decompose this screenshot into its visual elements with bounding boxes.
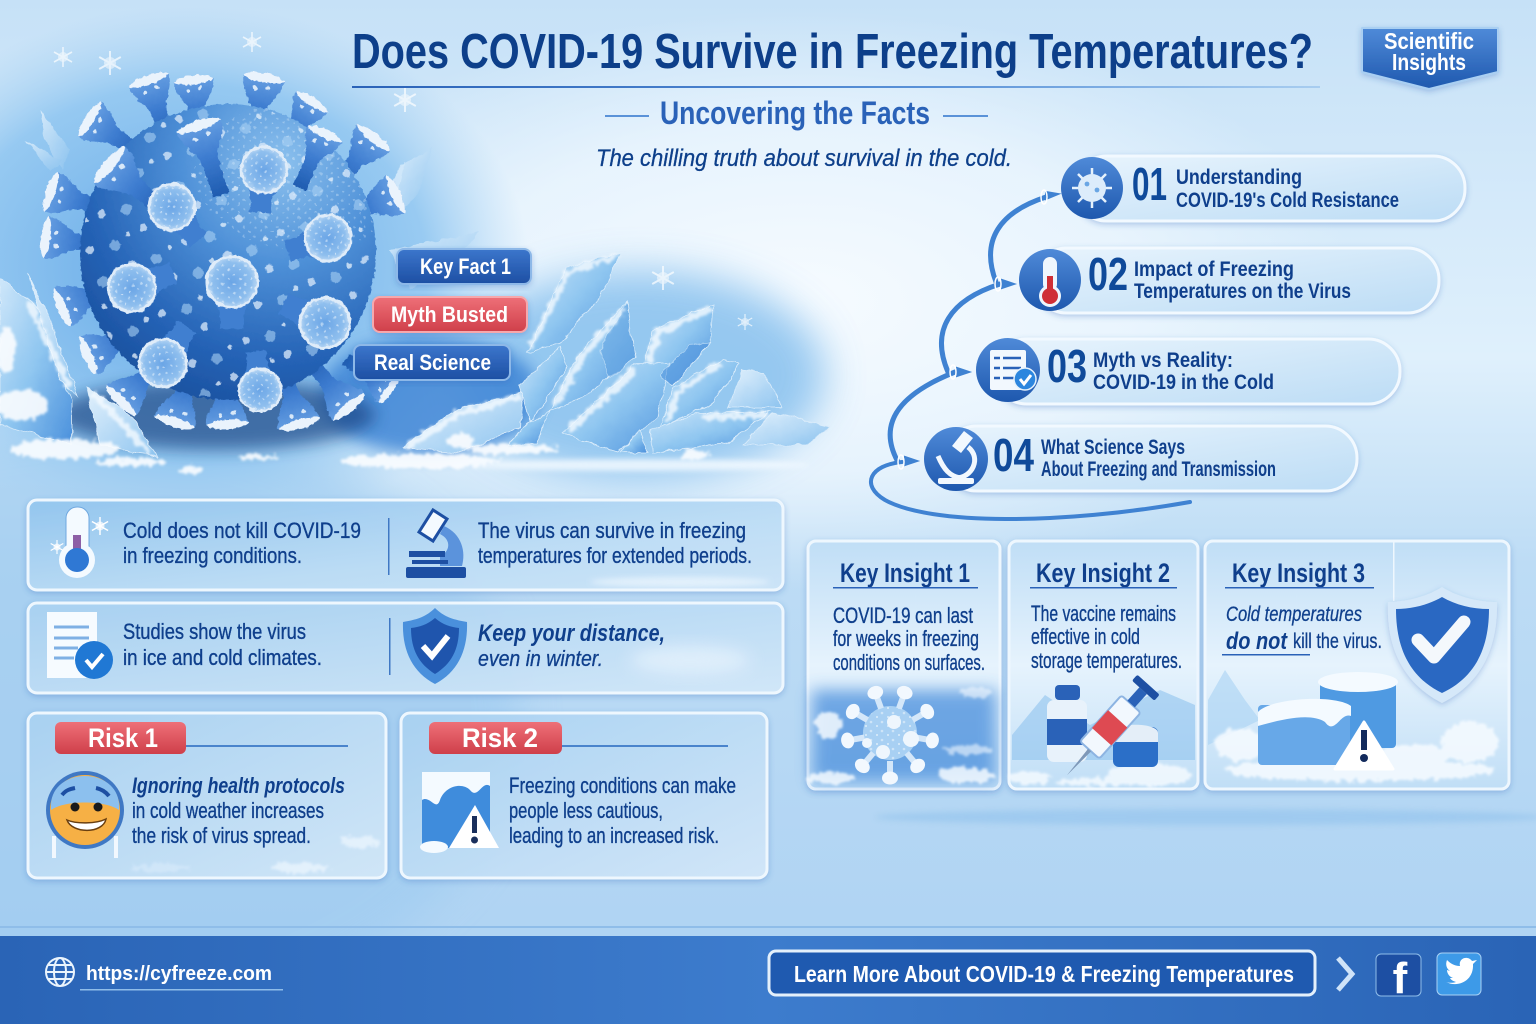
roadmap item 01: COVID-19's Cold Resistance xyxy=(1176,189,1399,212)
panel: Risk 2: leading to an increased risk. xyxy=(509,823,719,848)
call to action button xyxy=(769,951,1315,995)
panel: cold facts xyxy=(28,500,783,590)
label: Risk 1 xyxy=(55,722,186,754)
ice crystals xyxy=(0,253,830,457)
hero illustration: frozen virus and ice xyxy=(0,5,830,535)
badge: Scientific Insights: Scientific xyxy=(1384,28,1474,54)
tag: Myth Busted xyxy=(373,297,527,332)
icon: microscope xyxy=(406,510,466,578)
panel: cold facts: temperatures for extended periods. xyxy=(478,543,752,568)
roadmap item 04: About Freezing and Transmission xyxy=(1041,458,1276,481)
roadmap item 01: Understanding xyxy=(1176,166,1302,189)
card: Key Insight 1: conditions on surfaces. xyxy=(833,650,985,675)
label: Risk 2 xyxy=(429,722,562,754)
tag: Key Fact 1: Key Fact 1 xyxy=(420,254,511,279)
icon: microscope xyxy=(924,427,988,491)
card: Key Insight 1: Key Insight 1 xyxy=(840,558,970,588)
panel: studies and distance: in ice and cold climates. xyxy=(123,645,322,670)
badge: Scientific Insights xyxy=(1362,28,1498,89)
card: Key Insight 3: Cold temperatures xyxy=(1226,603,1362,626)
icon: ice block with warning xyxy=(420,772,499,853)
roadmap connector arrows xyxy=(871,190,1190,519)
icon: shield with check xyxy=(1388,587,1497,703)
card: Key Insight 1: for weeks in freezing xyxy=(833,626,979,651)
roadmap item 02: 02 xyxy=(1088,248,1128,300)
panel: cold facts: in freezing conditions. xyxy=(123,543,302,568)
icon: facebook xyxy=(1376,954,1421,1003)
roadmap item 02: Temperatures on the Virus xyxy=(1134,280,1351,303)
virus xyxy=(38,69,415,434)
tag: Key Fact 1 xyxy=(397,249,531,284)
roadmap item 02: Impact of Freezing xyxy=(1134,258,1294,281)
icon: shield xyxy=(403,608,467,684)
roadmap item 02 xyxy=(1019,248,1439,313)
card: Key Insight 2 xyxy=(1009,541,1198,789)
insight shadow xyxy=(875,809,1536,825)
roadmap item 01: 01 xyxy=(1132,158,1167,210)
tagline: The chilling truth about survival in the cold. xyxy=(596,145,1012,172)
panel: studies and distance: even in winter. xyxy=(478,646,603,671)
snow ground xyxy=(0,328,709,474)
card: Key Insight 2: effective in cold xyxy=(1031,624,1140,649)
card: Key Insight 3: Key Insight 3 xyxy=(1232,558,1365,588)
panel: studies and distance: Keep your distance, xyxy=(478,620,665,647)
icon: thermometer xyxy=(1019,249,1081,311)
tag: Real Science: Real Science xyxy=(374,350,491,375)
icon: thermometer with snowflakes xyxy=(51,507,108,578)
label: Risk 2: Risk 2 xyxy=(462,723,538,753)
tag: Myth Busted: Myth Busted xyxy=(391,302,508,327)
footer band xyxy=(0,926,1536,1024)
panel: studies and distance: Studies show the virus xyxy=(123,619,306,644)
panel: studies and distance xyxy=(28,603,783,693)
roadmap item 03 xyxy=(976,338,1400,404)
tag: Real Science xyxy=(354,345,510,380)
panel: cold facts: The virus can survive in freezing xyxy=(478,518,746,543)
roadmap item 03: 03 xyxy=(1047,340,1087,392)
arrow chevron xyxy=(1338,958,1352,990)
snowflakes xyxy=(54,32,752,330)
roadmap item 01 xyxy=(1061,156,1465,221)
panel: Risk 2 xyxy=(401,713,767,878)
panel: Risk 2: Freezing conditions can make xyxy=(509,773,736,798)
call to action button: Learn More About COVID-19 & Freezing Temperatures xyxy=(794,961,1294,987)
icon: facebook: f xyxy=(1393,954,1408,1003)
card: Key Insight 1 xyxy=(806,541,1000,789)
icon: cold face xyxy=(46,771,124,858)
panel: Risk 1: in cold weather increases xyxy=(132,798,324,823)
roadmap item 04: 04 xyxy=(993,429,1034,481)
illustration: ice blocks and snow xyxy=(1208,670,1498,781)
back ice crystals xyxy=(25,110,480,290)
roadmap item 04: What Science Says xyxy=(1041,436,1185,459)
panel: Risk 1: Ignoring health protocols xyxy=(132,773,345,798)
card: Key Insight 2: The vaccine remains xyxy=(1031,601,1176,626)
roadmap item 03: Myth vs Reality: xyxy=(1093,349,1233,372)
title: Does COVID-19 Survive in Freezing Temperatures? xyxy=(352,25,1313,79)
panel: Risk 1: the risk of virus spread. xyxy=(132,823,311,848)
card: Key Insight 2: storage temperatures. xyxy=(1031,648,1182,673)
panel: Risk 2: people less cautious, xyxy=(509,798,663,823)
card: Key Insight 3: do not xyxy=(1226,628,1288,655)
icon: twitter xyxy=(1437,953,1481,995)
website link: https://cyfreeze.com xyxy=(86,963,272,985)
card: Key Insight 3 xyxy=(1205,541,1509,789)
panel: Risk 1 xyxy=(28,713,386,878)
icon: globe xyxy=(46,958,74,986)
badge: Scientific Insights: Insights xyxy=(1392,49,1466,75)
icon: document with check xyxy=(47,612,113,679)
illustration: vaccine vial and syringe xyxy=(1010,675,1195,786)
subtitle: Uncovering the Facts xyxy=(660,95,930,131)
roadmap item 04 xyxy=(924,426,1357,491)
card: Key Insight 2: Key Insight 2 xyxy=(1036,558,1170,588)
card: Key Insight 3: kill the virus. xyxy=(1293,630,1382,653)
label: Risk 1: Risk 1 xyxy=(88,723,158,753)
card: Key Insight 1: COVID-19 can last xyxy=(833,603,973,628)
illustration: small virus in snow xyxy=(806,684,996,784)
icon: virus xyxy=(1061,157,1123,219)
snow on crystal edges xyxy=(30,256,765,450)
panel: cold facts: Cold does not kill COVID-19 xyxy=(123,518,361,543)
roadmap item 03: COVID-19 in the Cold xyxy=(1093,371,1274,394)
icon: warning triangle xyxy=(1335,722,1393,769)
icon: checklist xyxy=(976,338,1040,402)
